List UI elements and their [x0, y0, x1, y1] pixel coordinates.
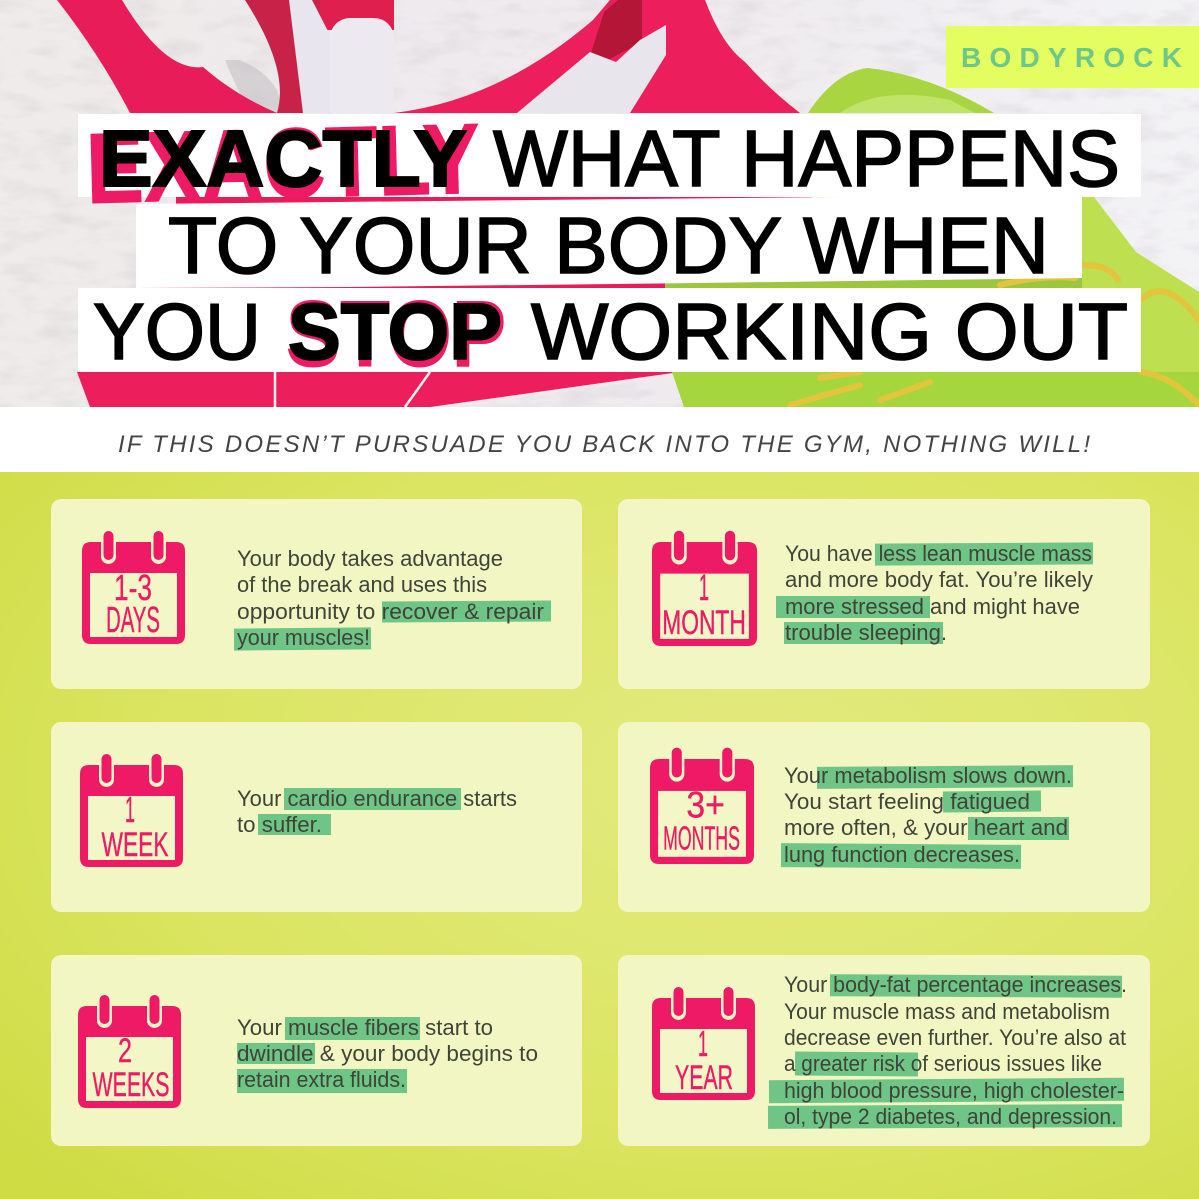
panel: 1 year: Your muscle mass and metabolism: [784, 999, 1110, 1024]
panel: 1 year: decrease even further. You’re also at: [784, 1025, 1126, 1050]
panel: 1-3 days: your muscles!: [237, 625, 370, 650]
panel: 1 month: more stressed and might have: [785, 594, 1080, 619]
panel: 3+ months: Your metabolism slows down.: [784, 763, 1072, 788]
panel: 2 weeks: dwindle & your body begins to: [237, 1041, 538, 1066]
title: EXACTLY: [85, 103, 482, 225]
hero photo background: [0, 0, 1199, 407]
panel: 2 weeks: Your muscle fibers start to: [237, 1015, 493, 1040]
panel: 1-3 days: [51, 499, 582, 689]
title: WHAT HAPPENS: [493, 114, 1120, 203]
icon: calendar 1 month: 1: [699, 567, 709, 608]
icon: calendar 1 week: [80, 751, 183, 867]
panel: 3+ months: lung function decreases.: [784, 842, 1020, 867]
icon: calendar 1 year: [652, 984, 755, 1100]
panel: 1 month: [618, 499, 1150, 689]
panel: 1 week: to suffer.: [237, 812, 322, 837]
title: YOU: [93, 287, 261, 376]
lime background: [0, 472, 1199, 1199]
panel: 1 year: ol, type 2 diabetes, and depression.: [784, 1104, 1117, 1129]
icon: calendar 1-3 days: [82, 528, 185, 644]
panel: 1 week: [51, 722, 582, 912]
panel: 1-3 days: opportunity to recover & repair: [237, 599, 544, 624]
panel: 1 year: a greater risk of serious issues like: [784, 1051, 1102, 1076]
icon: calendar 1 year: YEAR: [675, 1059, 733, 1097]
icon: calendar 3+ months: MONTHS: [663, 819, 740, 857]
panel: 3+ months: [618, 722, 1150, 912]
icon: calendar 3+ months: 3+: [686, 784, 725, 826]
title: WORKING OUT: [531, 287, 1128, 376]
panel: 1 year: high blood pressure, high cholester-: [784, 1078, 1124, 1103]
icon: calendar 2 weeks: 2: [118, 1032, 132, 1070]
icon: calendar 3+ months: [650, 745, 754, 864]
subtitle band: IF THIS DOESN’T PURSUADE YOU BACK INTO THE GYM, NOTHING WILL!: [118, 431, 1090, 458]
logo tag: BodyRock: BODYROCK: [961, 42, 1182, 73]
subtitle band: [0, 407, 1199, 472]
panel: 2 weeks: [51, 955, 582, 1146]
icon: calendar 1-3 days: DAYS: [106, 599, 160, 640]
icon: calendar 1-3 days: 1-3: [114, 567, 152, 608]
title: [78, 103, 1141, 386]
panel: 1 year: Your body-fat percentage increases.: [784, 972, 1127, 997]
panel: 3+ months: more often, & your heart and: [784, 815, 1068, 840]
panel: 1 week: Your cardio endurance starts: [237, 786, 517, 811]
panel: 1 month: and more body fat. You’re likely: [785, 567, 1093, 592]
panel: 2 weeks: retain extra fluids.: [237, 1067, 406, 1092]
icon: calendar 1 week: 1: [125, 789, 135, 830]
title: STOP: [286, 281, 506, 386]
icon: calendar 1 month: [652, 528, 757, 646]
icon: calendar 2 weeks: [78, 992, 181, 1108]
icon: calendar 1 week: WEEK: [102, 826, 169, 864]
panel: 1 year: [618, 955, 1150, 1146]
logo tag: BodyRock: [946, 26, 1199, 88]
panel: 1-3 days: of the break and uses this: [237, 572, 487, 597]
panel: 3+ months: You start feeling fatigued: [784, 789, 1030, 814]
title: STOP: [288, 287, 502, 376]
panel: 1 month: You have less lean muscle mass: [785, 541, 1092, 566]
icon: calendar 1 month: MONTH: [662, 604, 746, 642]
icon: calendar 2 weeks: WEEKS: [92, 1066, 170, 1104]
icon: calendar 1 year: 1: [698, 1023, 708, 1064]
title: TO YOUR BODY WHEN: [168, 201, 1049, 290]
panel: 1-3 days: Your body takes advantage: [237, 546, 503, 571]
title: EXACTLY: [99, 114, 467, 203]
panel: 1 month: trouble sleeping.: [785, 620, 947, 645]
